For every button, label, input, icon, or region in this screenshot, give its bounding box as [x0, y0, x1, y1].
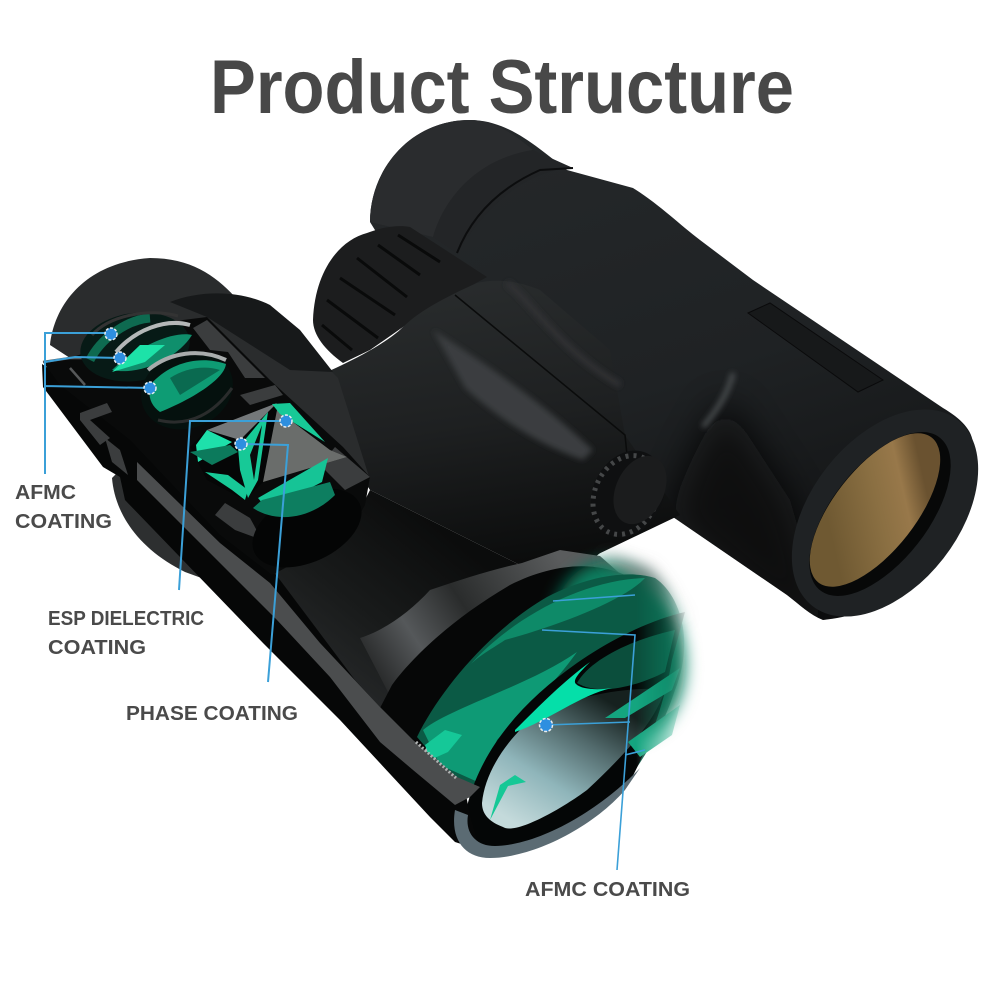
marker dots — [105, 328, 552, 732]
label: phase coating: PHASE COATING — [126, 703, 298, 725]
label: AFMC coating right: AFMC COATING — [525, 879, 690, 901]
eyepiece lens 1 — [76, 306, 194, 388]
gray strip — [137, 462, 480, 805]
lens glass — [482, 689, 665, 829]
near eyecup and ocular — [50, 258, 370, 480]
far barrel body — [370, 120, 973, 620]
ESP leader — [179, 421, 286, 590]
far ring seam — [457, 168, 573, 253]
serrated edge — [416, 742, 456, 778]
left AFMC leader — [45, 333, 150, 474]
hinge textured highlight — [433, 330, 593, 460]
glass green reflection — [490, 775, 526, 820]
label: AFMC coating left: AFMC — [15, 482, 76, 504]
lens black rim — [462, 612, 685, 854]
lower eyecup under cut — [112, 460, 262, 600]
leader lines — [45, 333, 645, 870]
right hinge ridge — [507, 283, 620, 385]
lens lower bright piece — [425, 730, 462, 760]
dot 2 — [114, 352, 126, 364]
near ocular ring — [170, 293, 333, 372]
eyepiece lens 2 — [129, 337, 245, 443]
label: ESP dielectric coating: COATING — [48, 637, 146, 659]
label: ESP dielectric coating — [48, 608, 204, 659]
lens green base — [417, 574, 684, 810]
dot 6 — [540, 718, 552, 732]
far barrel shadow — [670, 400, 830, 640]
cup under prism — [240, 473, 374, 583]
lens inner dark green — [577, 630, 675, 689]
dot 5 — [235, 438, 247, 450]
lens bright crescent — [515, 662, 612, 732]
lens blurred halo — [532, 546, 704, 754]
lens gray fuzz — [600, 555, 690, 625]
label: AFMC coating left: COATING — [15, 511, 112, 533]
frame pieces — [80, 320, 370, 540]
lens middle band — [423, 652, 577, 783]
far barrel highlight streak — [703, 373, 733, 427]
central hinge bridge — [300, 281, 680, 565]
binoculars illustration — [42, 120, 1000, 858]
prism — [190, 403, 347, 517]
far eyecup — [370, 120, 533, 237]
dot 4 — [280, 415, 292, 427]
dot 3 — [144, 382, 156, 394]
title: Product Structure — [210, 45, 794, 130]
focus dial — [577, 438, 679, 550]
black band before lens — [380, 566, 640, 750]
barrel light band — [360, 550, 625, 745]
label: AFMC coating left — [15, 482, 112, 533]
far barrel panel — [748, 303, 883, 392]
phase leader — [241, 444, 288, 682]
objective lens group — [417, 574, 685, 854]
black outer bevel — [42, 364, 480, 850]
right AFMC leader — [542, 595, 645, 870]
rear lens glass — [786, 412, 964, 608]
hinge seam line — [455, 295, 627, 455]
lower blue-gray housing — [454, 768, 640, 858]
far ring — [433, 150, 573, 253]
label: ESP dielectric coating: ESP DIELECTRIC — [48, 608, 204, 630]
cut plane black frame — [43, 317, 370, 575]
knurled focus ring — [313, 226, 487, 363]
near barrel dark body — [262, 490, 600, 730]
rear rubber ring — [754, 374, 1000, 652]
dot 1 — [105, 328, 117, 340]
lens right streaks — [605, 668, 680, 757]
lens upper band — [470, 578, 645, 665]
rear black inner — [782, 408, 978, 620]
